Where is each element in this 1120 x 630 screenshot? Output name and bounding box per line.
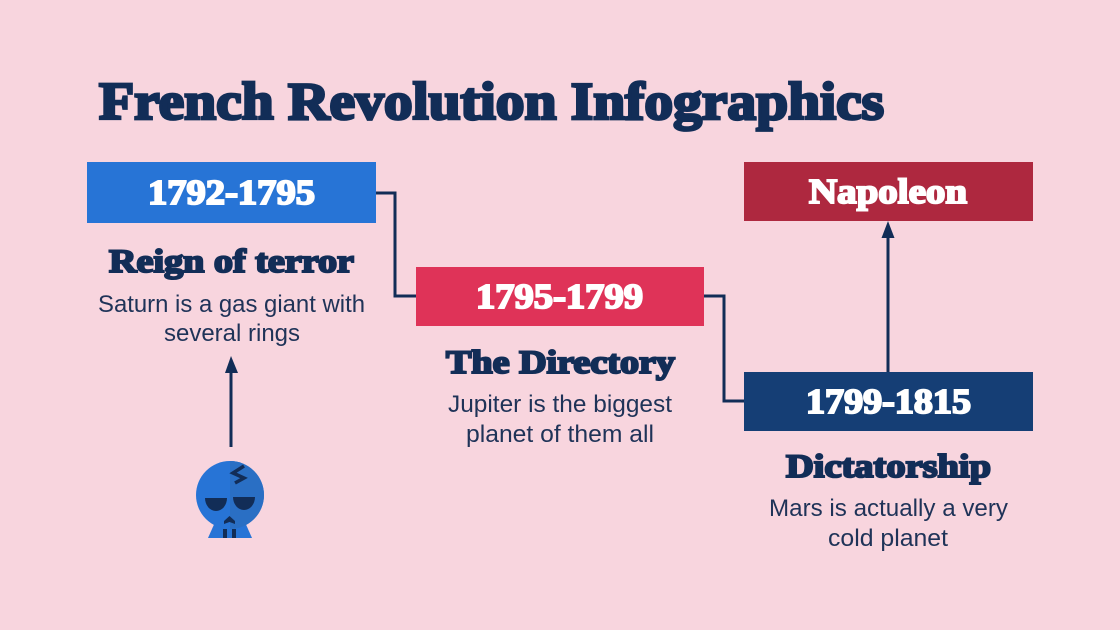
heading: Dictatorship: Dictatorship xyxy=(786,449,991,485)
description: Jupiter: Jupiter is the biggest xyxy=(448,391,672,418)
heading: Reign of terror: Reign of terror xyxy=(109,244,354,280)
date box: 1799-1815 xyxy=(744,372,1033,431)
connector: 1795-1799 to 1799-1815 xyxy=(704,296,744,401)
description: Jupiter: planet of them all xyxy=(466,421,654,448)
arrow: skull to Reign of terror xyxy=(225,356,238,447)
panel: The Directory xyxy=(416,267,704,448)
description: Mars: cold planet xyxy=(828,525,948,552)
description: Mars: Mars is actually a very xyxy=(769,495,1008,522)
panel: Reign of terror xyxy=(87,162,376,347)
box: Napoleon xyxy=(744,162,1033,221)
description: Saturn xyxy=(98,291,365,347)
date box: 1795-1799: 1795-1799 xyxy=(476,277,643,316)
description: Saturn: Saturn is a gas giant with xyxy=(98,291,365,318)
date box: 1792-1795: 1792-1795 xyxy=(148,173,315,212)
box: Napoleon: Napoleon xyxy=(809,172,967,211)
heading: The Directory: The Directory xyxy=(446,345,676,381)
description: Saturn: several rings xyxy=(164,320,300,347)
description: Jupiter xyxy=(448,391,672,448)
panel: Dictatorship xyxy=(744,372,1033,552)
date box: 1795-1799 xyxy=(416,267,704,326)
arrow: dictatorship to Napoleon xyxy=(882,221,894,372)
title: French Revolution Infographics xyxy=(99,73,884,131)
date box: 1799-1815: 1799-1815 xyxy=(806,382,971,421)
description: Mars xyxy=(769,495,1008,552)
icon: skull xyxy=(196,461,264,538)
date box: 1792-1795 xyxy=(87,162,376,223)
connector: 1792-1795 to 1795-1799 xyxy=(376,193,416,296)
